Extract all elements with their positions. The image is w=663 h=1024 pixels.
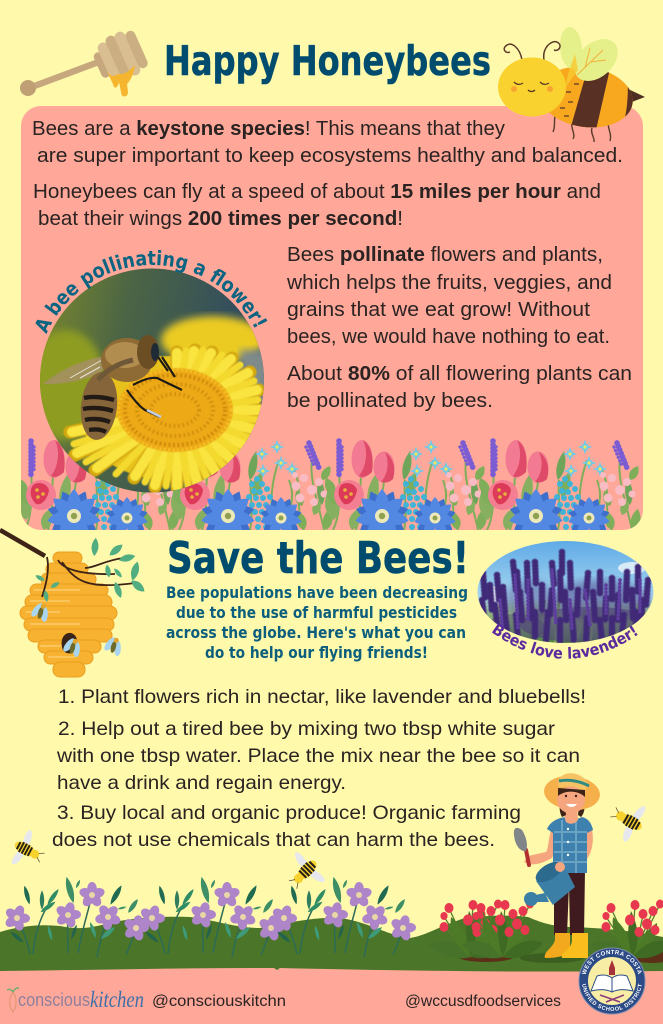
logo: school district badge: UNIFIED SCHOOL DISTRICT: [582, 984, 642, 1011]
icon: honey dipper: [20, 33, 144, 96]
text block: flying speed: Honeybees can fly at a speed of about 15 miles per hour and: [33, 180, 601, 203]
logo: school district badge: [578, 948, 646, 1014]
icon: cartoon bee: [498, 26, 650, 142]
text block: pollination: grains that we eat grow! Without: [287, 298, 590, 321]
text block: bee populations intro: Bee populations have been decreasing: [166, 583, 468, 602]
text line: ecosystems: are super important to keep ecosystems healthy and balanced.: [37, 144, 623, 167]
icon: flying bee centre: [278, 847, 330, 899]
illustration: flower border: [21, 438, 641, 530]
plants: purple flower row: [0, 876, 420, 957]
photo: lavender field: [477, 540, 660, 645]
icon: flying bee right: [603, 794, 652, 846]
text block: step 3: [52, 802, 521, 851]
heading: Save the Bees!: Save the Bees!: [167, 533, 469, 584]
text block: keystone species: Bees are a keystone species! This means that they: [32, 117, 506, 140]
icon: beehive on branch: [0, 530, 147, 677]
footer band: [0, 968, 663, 1024]
text block: bee populations intro: due to the use of harmful pesticides: [176, 603, 457, 622]
text block: bee populations intro: across the globe. Here's what you can: [166, 623, 466, 642]
text block: pollination: Bees pollinate flowers and plants,: [287, 243, 603, 266]
social handle: food services: @wccusdfoodservices: [405, 993, 561, 1010]
text block: 80 percent: About 80% of all flowering plants can: [287, 362, 632, 385]
panel: salmon facts panel: [21, 106, 643, 530]
logo: conscious kitchen: [7, 987, 144, 1012]
text block: step 3: does not use chemicals that can harm the bees.: [52, 829, 495, 851]
logo: school district badge: WEST CONTRA COSTA: [582, 950, 642, 974]
text block: step 1: 1. Plant flowers rich in nectar, like lavender and bluebells!: [58, 686, 586, 708]
text block: step 2: have a drink and regain energy.: [57, 772, 346, 794]
text line: wing beats: beat their wings 200 times per second!: [38, 207, 403, 230]
logo: conscious kitchen: kitchen: [90, 987, 144, 1012]
illustration: gardener with watering can: [514, 773, 602, 963]
text block: pollination: [286, 243, 612, 348]
plants: red tulips right bed: [591, 900, 663, 963]
curved caption: Bees love lavender!: Bees love lavender!: [492, 623, 638, 659]
text block: bee populations intro: do to help our flying friends!: [205, 643, 428, 662]
illustration: green ground: [0, 916, 663, 972]
text block: step 2: with one tbsp water. Place the mix near the bee so it can: [56, 745, 580, 767]
plants: red tulips left bed: [429, 900, 543, 962]
text block: 80 percent: [287, 362, 632, 412]
text block: pollination: which helps the fruits, veggies, and: [286, 271, 612, 294]
icon: flying bee left: [6, 826, 51, 875]
social handle: conscious kitchen: @consciouskitchn: [152, 993, 286, 1010]
text block: bee populations intro: [166, 583, 468, 662]
logo: conscious kitchen: conscious: [18, 990, 90, 1010]
text block: step 2: 2. Help out a tired bee by mixing two tbsp white sugar: [58, 718, 556, 740]
text block: step 3: 3. Buy local and organic produce! Organic farming: [57, 802, 521, 824]
text block: 80 percent: be pollinated by bees.: [287, 389, 493, 412]
curved caption: A bee pollinating a flower!: A bee pollinating a flower!: [35, 250, 268, 334]
text block: step 2: [56, 718, 580, 794]
title: Happy Honeybees: Happy Honeybees: [164, 37, 491, 85]
text block: pollination: bees, we would have nothing to eat.: [287, 325, 610, 348]
photo: bee on yellow flower: [26, 268, 270, 495]
